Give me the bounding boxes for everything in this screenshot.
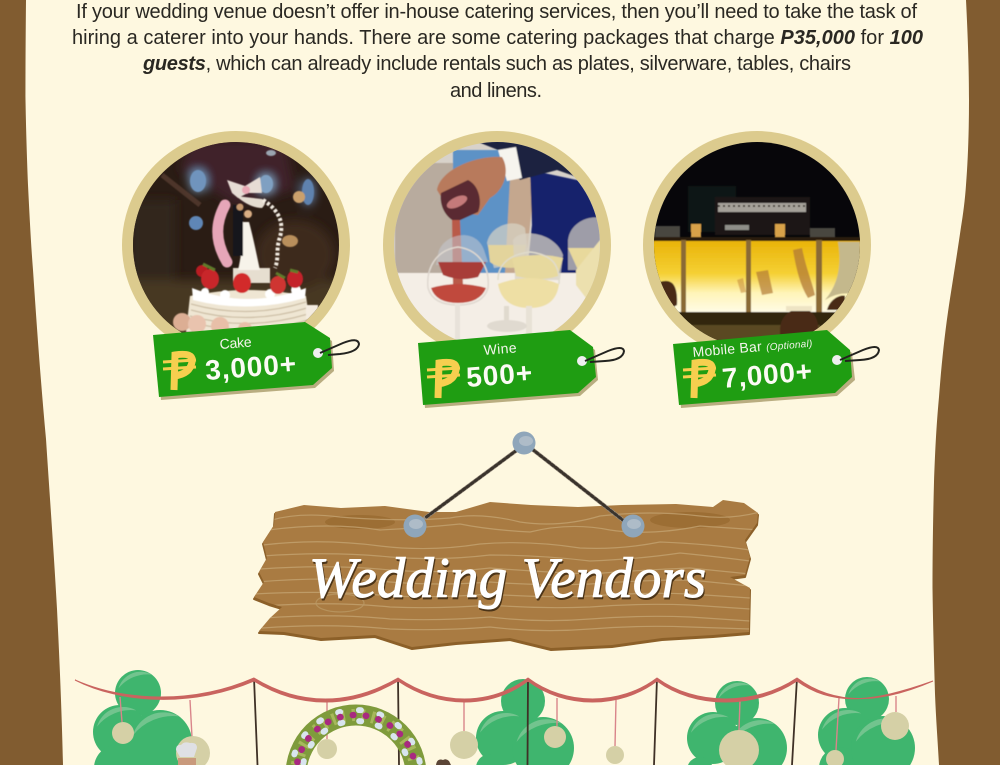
icon: peso sign [683, 362, 716, 398]
ornament inside arch [317, 739, 337, 759]
icon: string loop [840, 347, 879, 361]
intro paragraph: If your wedding venue doesn’t offer in-house catering services, then you’ll need to take the task of [76, 1, 917, 23]
nail: left [404, 514, 426, 538]
hanging ornaments [112, 696, 909, 765]
intro paragraph [72, 1, 923, 102]
price: 3,000+: 3,000+ [204, 348, 297, 386]
intro paragraph: guests, which can already include rentals such as plates, silverware, tables, chairs [142, 53, 851, 75]
cake photo [133, 142, 339, 332]
nail: top [512, 432, 536, 454]
label: mobile bar optional: Mobile Bar (Optional) [692, 334, 813, 360]
tree group 3 [687, 681, 787, 765]
garden scene: trees, bunting and arch [75, 670, 933, 765]
label: cake: Cake [219, 334, 252, 352]
flower arch [291, 710, 421, 765]
price: 7,000+: 7,000+ [721, 355, 813, 394]
chef figure [176, 742, 197, 765]
price tag: cake [153, 322, 359, 400]
heading: wedding vendors: Wedding Vendors [309, 547, 706, 610]
gold photo ring [122, 131, 350, 359]
price tag: wine [418, 330, 624, 408]
icon: peso sign [427, 362, 460, 398]
tree group 1 [93, 670, 192, 765]
right brown border [932, 0, 1000, 765]
label: wine: Wine [483, 339, 517, 358]
wine photo [394, 142, 600, 340]
icon: string loop [585, 348, 624, 362]
catering item: wine [383, 131, 624, 408]
gold photo ring [643, 131, 871, 359]
left brown border [0, 0, 63, 765]
intro paragraph: and linens. [450, 80, 542, 102]
hanging rope [425, 449, 624, 521]
price: 500+: 500+ [465, 357, 533, 393]
catering item: cake [122, 131, 359, 400]
mobile bar photo [654, 142, 860, 340]
catering item: mobile bar [643, 131, 879, 408]
icon: string loop [320, 340, 359, 355]
tree group 2 [476, 679, 574, 765]
bunting poles [254, 678, 797, 765]
price tag: mobile bar [673, 330, 879, 408]
nail: right [622, 514, 644, 538]
intro paragraph: hiring a caterer into your hands. There are some catering packages that charge P35,000 for 100 [72, 27, 923, 49]
icon: peso sign [163, 354, 196, 390]
red bunting [75, 678, 933, 702]
hanging wooden sign: wedding vendors [254, 432, 760, 650]
wood plank [254, 500, 760, 650]
tree group 4 [818, 677, 915, 765]
gold photo ring [383, 131, 611, 359]
guest figure hair [436, 759, 451, 765]
